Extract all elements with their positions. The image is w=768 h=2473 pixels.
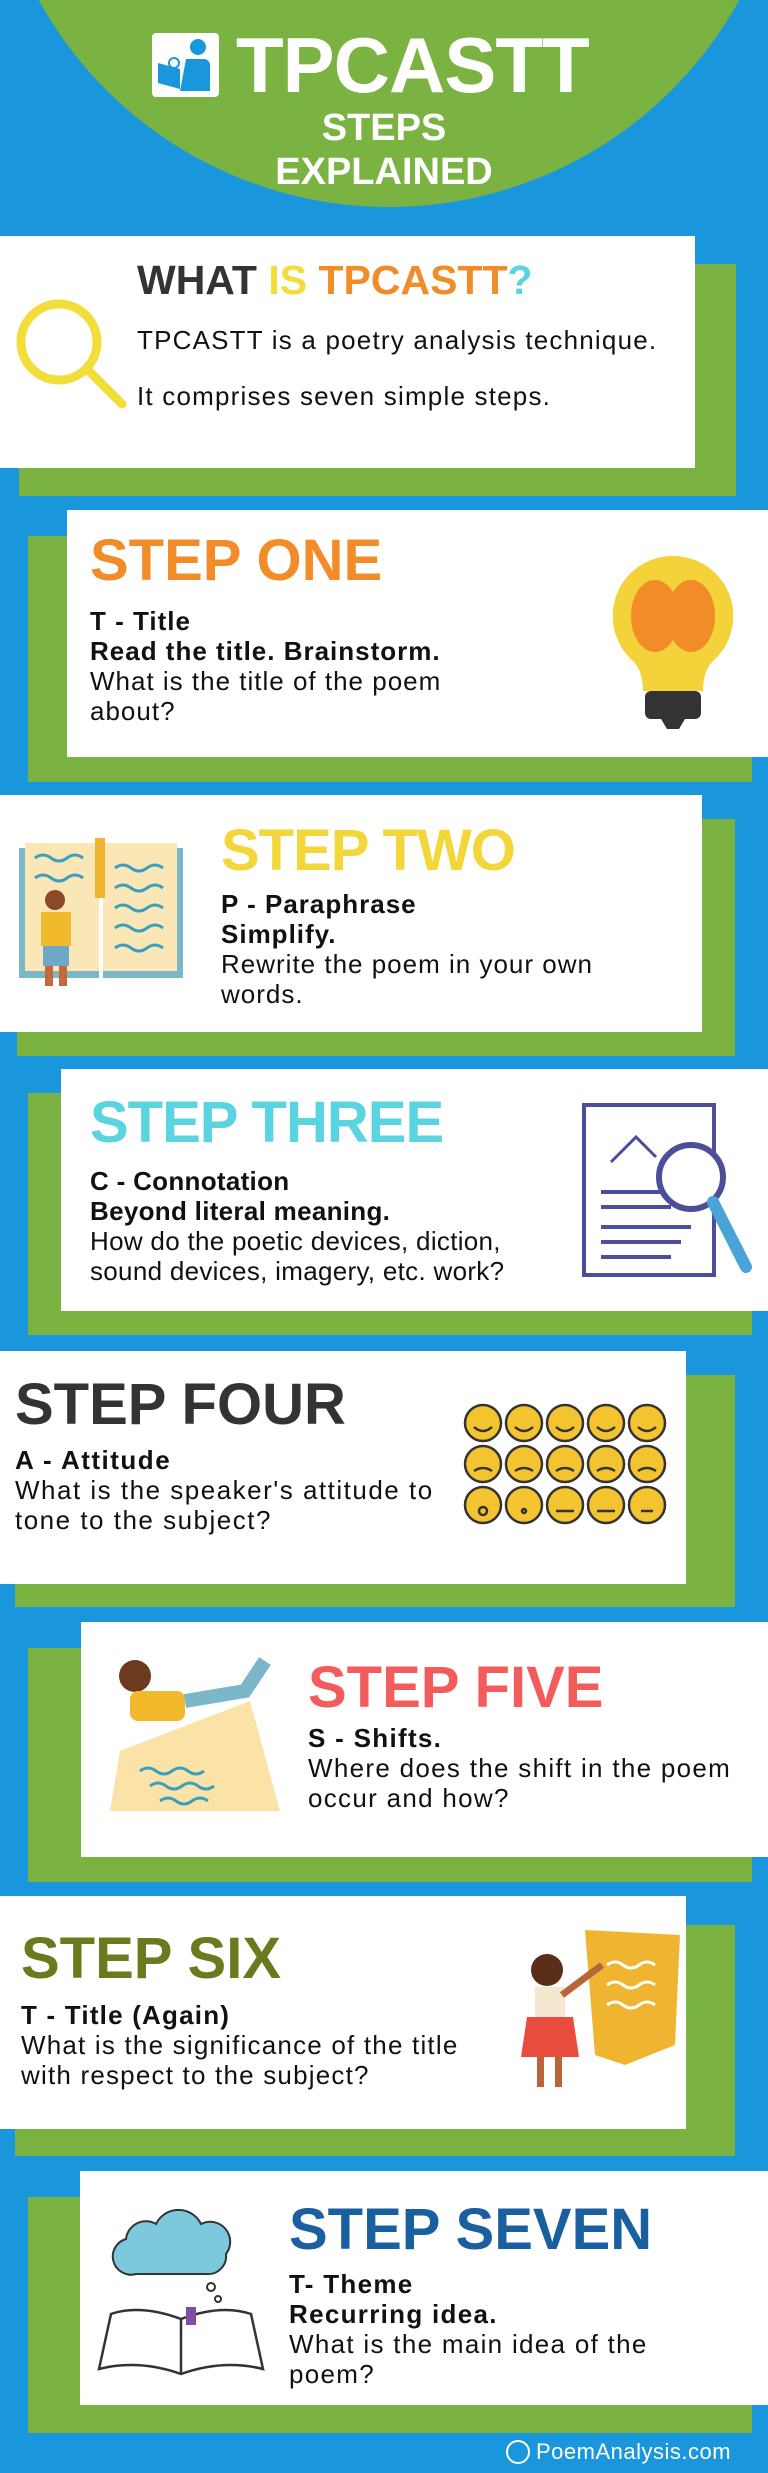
text: TPCASTT is a poetry analysis technique.	[137, 325, 657, 355]
panel: step five: S - Shifts.	[308, 1723, 442, 1753]
panel: step one: T - Title	[90, 606, 191, 636]
panel: step four: What is the speaker's attitude to	[15, 1475, 434, 1505]
panel: step six: What is the significance of the title	[21, 2030, 458, 2060]
panel: step one: about?	[90, 696, 176, 726]
panel: step five	[28, 1622, 768, 1882]
panel: step six: STEP SIX	[21, 1926, 281, 1991]
panel: step three	[28, 1069, 768, 1335]
panel: step three: sound devices, imagery, etc. work?	[90, 1256, 504, 1286]
subtitle: STEPS	[322, 107, 446, 149]
illustration: book and boy	[19, 838, 183, 986]
panel: step one: Read the title. Brainstorm.	[90, 636, 441, 666]
panel: step seven: T- Theme	[289, 2269, 414, 2299]
panel: step two: words.	[221, 979, 304, 1009]
panel: step seven: STEP SEVEN	[289, 2197, 652, 2262]
panel: step six: with respect to the subject?	[21, 2060, 370, 2090]
panel: step two: STEP TWO	[221, 818, 515, 883]
icon: document with magnifier	[582, 1103, 752, 1277]
subtitle	[275, 107, 493, 193]
panel: step three: How do the poetic devices, diction,	[90, 1226, 501, 1256]
panel: step seven: What is the main idea of the	[289, 2329, 648, 2359]
icon: lightbulb brain	[612, 556, 734, 729]
panel: step four	[0, 1351, 735, 1607]
illustration: book with thought cloud	[97, 2209, 265, 2376]
panel: step three: STEP THREE	[90, 1090, 443, 1155]
title: TPCASTT	[236, 21, 589, 109]
panel: step five: Where does the shift in the poem	[308, 1753, 731, 1783]
header circle	[0, 0, 768, 207]
panel: step two: P - Paraphrase	[221, 889, 417, 919]
panel: step seven	[28, 2171, 768, 2433]
subtitle: EXPLAINED	[275, 151, 493, 193]
panel: step three: C - Connotation	[90, 1166, 289, 1196]
panel: step five: STEP FIVE	[308, 1655, 603, 1720]
panel: step seven: poem?	[289, 2359, 375, 2389]
panel: step two: Rewrite the poem in your own	[221, 949, 593, 979]
panel: step four: STEP FOUR	[15, 1372, 346, 1437]
panel: step six	[0, 1896, 735, 2156]
heading: WHAT IS TPCASTT?	[137, 257, 533, 303]
panel: step six: T - Title (Again)	[21, 2000, 230, 2030]
panel: step five: occur and how?	[308, 1783, 510, 1813]
panel: what is: It comprises seven simple steps.	[137, 381, 551, 411]
title icon	[152, 33, 219, 97]
icon: emoji grid	[464, 1404, 666, 1524]
panel: what is	[0, 236, 736, 496]
footer: website: PoemAnalysis.com	[536, 2439, 731, 2464]
panel: step two: Simplify.	[221, 919, 336, 949]
panel: step one: STEP ONE	[90, 528, 382, 593]
panel: step four: A - Attitude	[15, 1445, 171, 1475]
panel: step one	[28, 510, 768, 782]
panel: step two	[0, 795, 735, 1056]
illustration: girl with poster	[521, 1930, 680, 2087]
panel: step three: Beyond literal meaning.	[90, 1196, 390, 1226]
panel: step seven: Recurring idea.	[289, 2299, 498, 2329]
panel: step four: tone to the subject?	[15, 1505, 272, 1535]
icon: magnifier	[16, 300, 126, 408]
illustration: boy writing	[110, 1657, 280, 1811]
panel: step one: What is the title of the poem	[90, 666, 441, 696]
